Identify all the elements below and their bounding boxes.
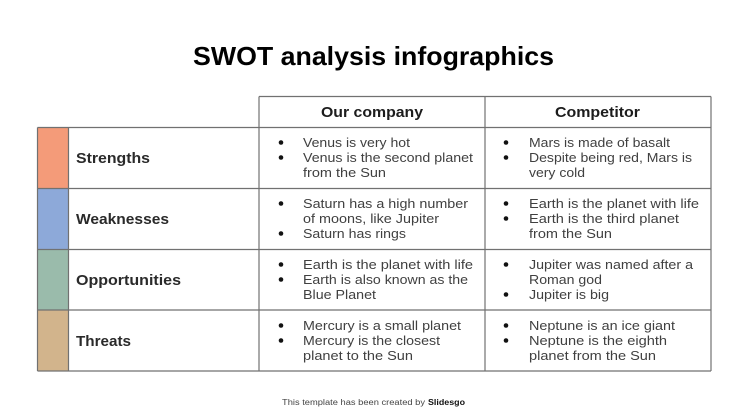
cell: threats, our company: Mercury is the closest [303,333,440,348]
row label: opportunities: Opportunities [76,272,181,289]
cell: threats, competitor [504,318,675,363]
cell: threats, our company: Mercury is a small planet [303,318,461,333]
cell: strengths, competitor: Mars is made of basalt [529,135,670,150]
column header: our company: Our company [321,104,424,121]
cell: strengths, competitor [504,135,693,180]
cell: weaknesses, competitor: Earth is the planet with life [529,196,699,211]
table grid [38,96,711,371]
footer credit: This template has been created by [282,398,425,407]
cell: opportunities, competitor: Jupiter was named after a [529,257,694,272]
cell: weaknesses, competitor: from the Sun [529,226,612,241]
cell: weaknesses, our company: Saturn has a high number [303,196,469,211]
cell: weaknesses, our company [279,196,469,241]
cell: opportunities, competitor: Roman god [529,272,602,287]
cell: weaknesses, our company: of moons, like Jupiter [303,211,440,226]
cell: threats, our company: planet to the Sun [303,348,413,363]
title: SWOT analysis infographics [193,41,554,71]
cell: strengths, our company [279,135,473,180]
cell: threats, competitor: planet from the Sun [529,348,656,363]
cell: opportunities, our company: Blue Planet [303,287,376,302]
cell: weaknesses, our company: Saturn has rings [303,226,407,241]
cell: threats, competitor: Neptune is an ice giant [529,318,675,333]
cell: strengths, our company: Venus is the second planet [303,150,473,165]
colour block: threats [38,310,68,371]
cell: threats, our company [279,318,461,363]
cell: opportunities, our company: Earth is also known as the [303,272,468,287]
cell: threats, competitor: Neptune is the eighth [529,333,667,348]
row label: threats: Threats [76,333,131,350]
footer credit: Slidesgo [428,398,465,407]
SWOT table [38,96,711,371]
row label: strengths: Strengths [76,150,150,167]
cell: opportunities, our company [279,257,473,302]
colour block: strengths [38,128,68,188]
colour block: opportunities [38,250,68,310]
cell: strengths, competitor: very cold [529,165,585,180]
colour block: weaknesses [38,189,68,250]
cell: opportunities, competitor [504,257,694,302]
column header: competitor: Competitor [555,104,640,121]
cell: strengths, our company: Venus is very hot [303,135,410,150]
cell: weaknesses, competitor: Earth is the third planet [529,211,679,226]
cell: opportunities, competitor: Jupiter is big [529,287,609,302]
cell: strengths, competitor: Despite being red, Mars is [529,150,693,165]
cell: weaknesses, competitor [504,196,699,241]
cell: strengths, our company: from the Sun [303,165,386,180]
cell: opportunities, our company: Earth is the planet with life [303,257,473,272]
row label: weaknesses: Weaknesses [76,211,169,228]
footer credit [282,398,465,407]
